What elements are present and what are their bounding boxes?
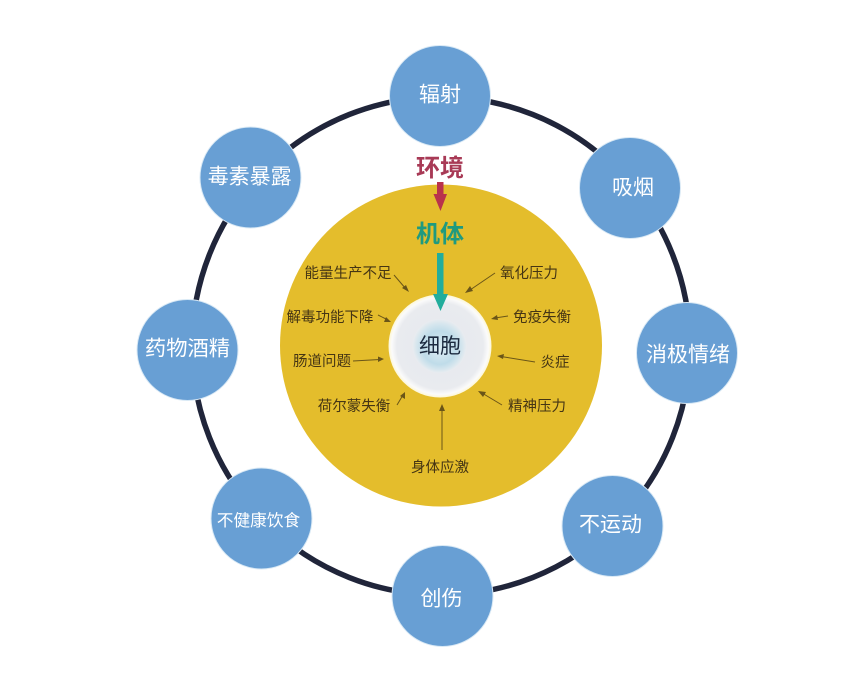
- node: negative emotions: 消极情绪: [646, 344, 730, 366]
- cell label: 细胞: [419, 335, 461, 358]
- arrow: organism to cell: [433, 253, 448, 311]
- node: toxin exposure: [200, 127, 301, 228]
- outer ring: [192, 97, 690, 595]
- node: smoking: [580, 138, 680, 238]
- heading: organism: 机体: [416, 221, 464, 248]
- factor: hormone imbalance: 荷尔蒙失衡: [318, 398, 390, 415]
- factor: hormone imbalance: [318, 392, 405, 415]
- factor: oxidative stress: 氧化压力: [500, 265, 558, 282]
- factor: inflammation: 炎症: [540, 354, 570, 371]
- factor: immune imbalance: 免疫失衡: [513, 309, 571, 326]
- factor: gut problems: [293, 353, 384, 370]
- node: smoking: 吸烟: [612, 176, 654, 200]
- node: radiation: 辐射: [419, 84, 461, 106]
- node: unhealthy diet: 不健康饮食: [217, 511, 301, 530]
- node: no exercise: [562, 476, 663, 576]
- factor: energy shortage: 能量生产不足: [304, 265, 392, 282]
- node: toxin exposure: 毒素暴露: [208, 166, 292, 188]
- factor: body stress: [411, 404, 469, 476]
- factor: oxidative stress: [465, 265, 558, 293]
- factor: immune imbalance: [491, 309, 571, 326]
- cell: blue core: [412, 319, 466, 373]
- heading: environment: 环境: [416, 155, 464, 182]
- node: trauma: [392, 546, 493, 646]
- factor: detox decline: 解毒功能下降: [286, 309, 374, 326]
- factor: mental stress: [478, 391, 566, 415]
- factor: inflammation: [497, 354, 570, 371]
- factor: gut problems: 肠道问题: [293, 353, 351, 370]
- node: drugs and alcohol: 药物酒精: [145, 336, 230, 360]
- node: unhealthy diet: [211, 468, 312, 569]
- cell: white outer circle: [388, 294, 492, 398]
- factor: mental stress: 精神压力: [508, 398, 566, 415]
- factor: energy shortage: [304, 265, 409, 292]
- factor: body stress: 身体应激: [411, 458, 469, 476]
- node: drugs and alcohol: [137, 300, 238, 400]
- node: trauma: 创伤: [420, 588, 462, 610]
- node: negative emotions: [636, 302, 738, 404]
- node: radiation: [390, 46, 490, 146]
- yellow disk: organism: [280, 184, 602, 506]
- arrow: environment to organism: [434, 182, 447, 211]
- node: no exercise: 不运动: [579, 514, 642, 536]
